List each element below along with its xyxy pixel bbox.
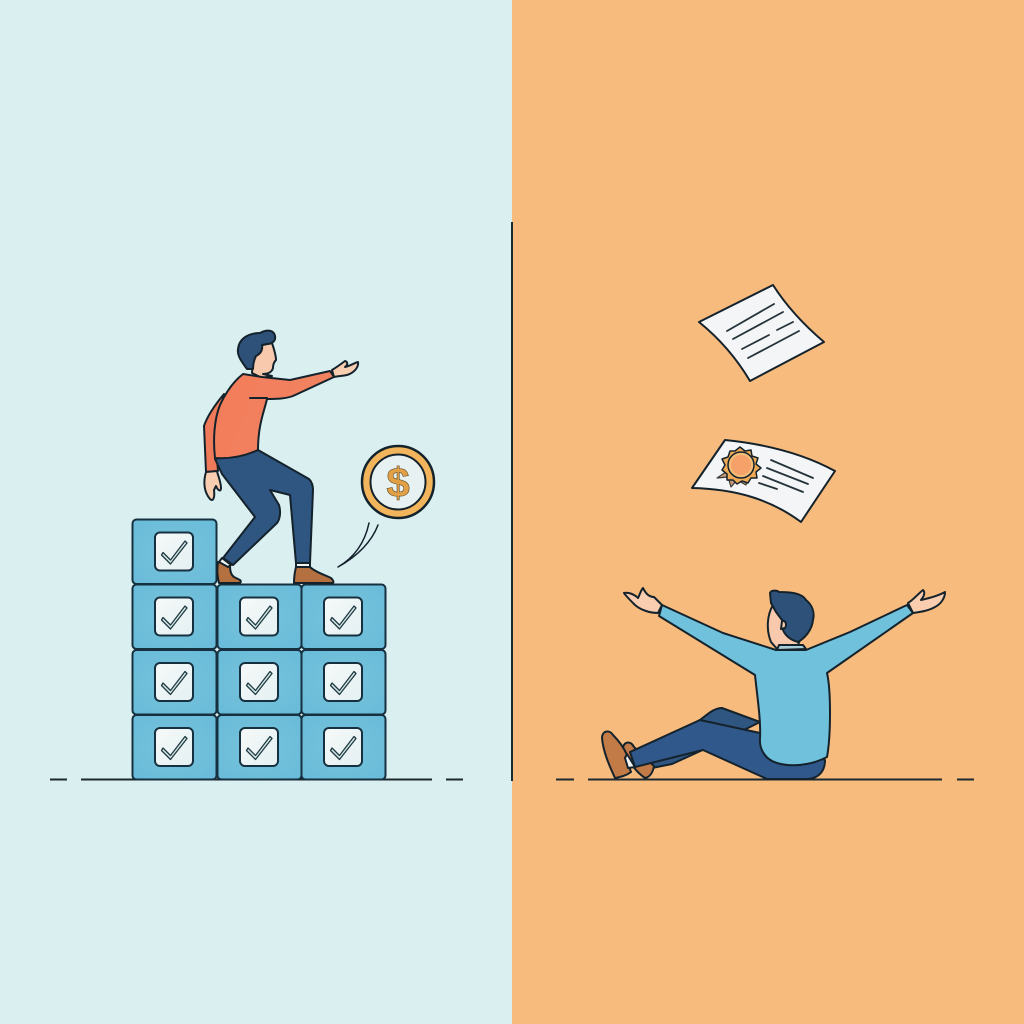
- far shoe: [623, 742, 654, 778]
- big shoe: [602, 731, 631, 778]
- underarm line: [250, 397, 267, 399]
- near leg: [630, 720, 825, 779]
- hair: [238, 331, 275, 369]
- face: [768, 605, 800, 650]
- far leg: [642, 708, 760, 770]
- motion lines: [338, 523, 378, 567]
- right shoe: [294, 566, 333, 583]
- figure: man climbing blocks: [204, 331, 358, 583]
- reaching hand: [332, 361, 358, 377]
- face and neck: [252, 343, 276, 378]
- icon: floating document: [699, 285, 824, 381]
- sweater: [659, 605, 913, 765]
- ribbon: [717, 470, 749, 487]
- dollar sign: $: [386, 459, 410, 506]
- trousers: [215, 450, 313, 565]
- center divider: [511, 222, 513, 781]
- ear: [781, 621, 786, 629]
- left hand: [204, 471, 221, 500]
- right ground line: [556, 778, 974, 780]
- collar: [777, 645, 806, 650]
- left shoe: [217, 562, 241, 583]
- icon: floating certificate: [692, 440, 835, 522]
- panel: left background: [0, 0, 512, 1024]
- panel: right background: [512, 0, 1024, 1024]
- near sock: [625, 754, 635, 768]
- torso and reaching arm: [214, 371, 334, 458]
- hands: [624, 588, 945, 613]
- icon: dollar coin: [362, 446, 434, 518]
- hair: [770, 591, 814, 642]
- block stack with checkmarks: [132, 520, 386, 780]
- socks: [219, 558, 310, 567]
- back arm: [204, 394, 224, 472]
- figure: man fallen on ground: [602, 588, 945, 779]
- left ground line: [50, 778, 463, 780]
- seal: [722, 447, 761, 484]
